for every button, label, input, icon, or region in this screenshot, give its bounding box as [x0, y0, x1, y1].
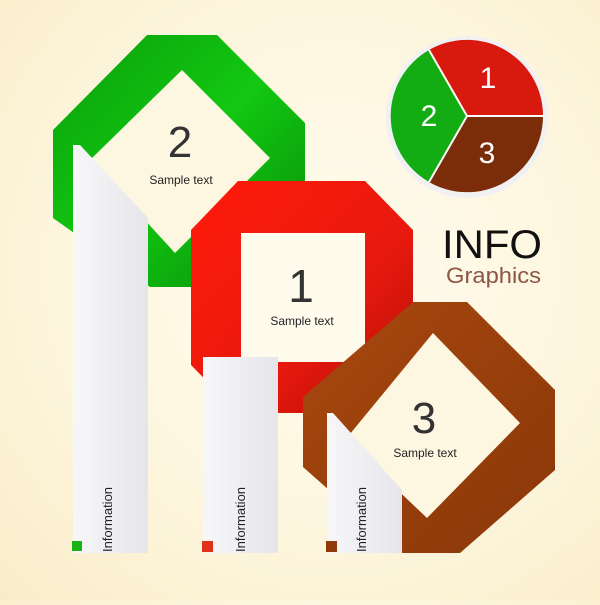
panel: information 3 — [326, 413, 402, 553]
label: sample text 3: Sample text — [393, 446, 457, 460]
panel: information 2: Information — [233, 487, 248, 552]
subtitle: Graphics: Graphics — [446, 263, 541, 288]
number 2: 2 — [168, 118, 192, 167]
pie chart — [386, 36, 548, 198]
pie chart: 1 — [480, 62, 496, 95]
pie chart: 3 — [479, 137, 495, 170]
label: sample text 2: Sample text — [149, 173, 213, 187]
title: INFO: INFO — [442, 223, 542, 267]
ribbon: brown — [303, 302, 555, 553]
panel: information 1: Information — [100, 487, 115, 552]
ribbon: red — [191, 181, 413, 413]
panel: information 1 — [72, 145, 148, 553]
ribbon: green — [53, 35, 305, 287]
panel: information 2 — [202, 357, 278, 553]
panel: information 3: Information — [354, 487, 369, 552]
label: sample text 1: Sample text — [270, 314, 334, 328]
pie chart: 2 — [421, 100, 437, 133]
number 3: 3 — [412, 394, 436, 443]
number 1: 1 — [288, 260, 314, 312]
